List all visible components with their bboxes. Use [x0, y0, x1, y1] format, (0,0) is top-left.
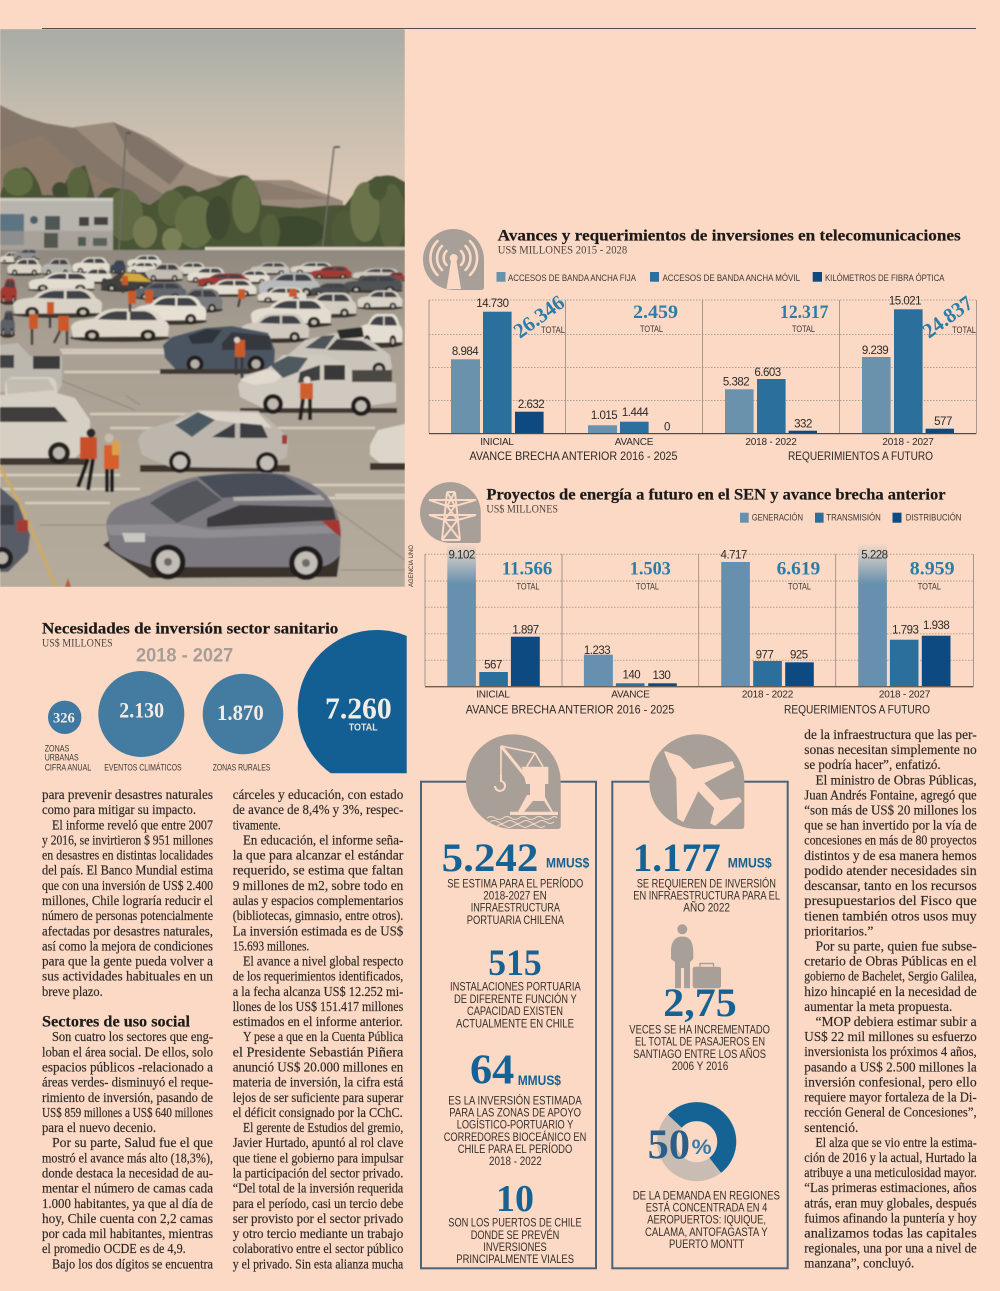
bubble labels: URBANAS	[45, 753, 79, 764]
bubble: zonas rurales: 1.870	[217, 700, 264, 725]
donut chart: 50%: %	[692, 1136, 712, 1159]
text column 2: el Presidente Sebastián Piñera	[233, 1045, 404, 1060]
stat: 64: MMUS$	[518, 1073, 561, 1088]
text column 3: El ministro de Obras Públicas,	[816, 773, 977, 788]
bar chart: energy: 8.959	[910, 558, 955, 579]
two workers	[78, 428, 120, 492]
text column 2: materia de inversión, la cifra está	[233, 1076, 404, 1091]
text column 1: US$ 859 millones a US$ 640 millones	[42, 1106, 213, 1121]
stat: 2,75: SANTIAGO ENTRE LOS AÑOS	[633, 1048, 766, 1061]
text column 1: loban el área social. De ellos, solo	[42, 1045, 213, 1060]
top rule	[42, 28, 976, 29]
text column 3: ción de 2016 y la actual, Hurtado la	[804, 1151, 977, 1166]
text column 1: como para mitigar su impacto.	[42, 803, 196, 818]
stat: 2,75: EL TOTAL DE PASAJEROS EN	[635, 1037, 765, 1049]
text column 2: para el período, casi un tercio debe	[233, 1197, 403, 1212]
text column 3: “son más de US$ 20 millones los	[804, 804, 977, 818]
text column 3: regionales, una por una a nivel de	[804, 1242, 977, 1257]
panel: telecom investments	[423, 228, 977, 463]
text column 3: se podría hacer”, enfatizó.	[804, 758, 941, 773]
bar chart: energy: 11.566	[502, 558, 552, 579]
stat: 1.177	[633, 835, 780, 915]
dark suv	[163, 326, 275, 372]
stat: 10: DONDE SE PREVÉN	[471, 1229, 559, 1242]
donut caption: PUERTO MONTT	[669, 1239, 744, 1251]
text column 3: pasando a US$ 2.500 millones la	[804, 1060, 977, 1075]
silver car top right	[288, 333, 392, 375]
text column 2: 9 millones de m2, sobre todo en	[233, 879, 403, 894]
text column 3: El alza que se vio entre la estima-	[816, 1136, 977, 1151]
donut chart: 50%: 50	[648, 1122, 690, 1168]
stat: 2,75	[629, 980, 770, 1073]
legend	[496, 272, 945, 284]
bar chart: energy: TOTAL	[918, 581, 941, 592]
bar chart: telecom: TOTAL	[952, 325, 976, 336]
text column 1: donde destaca la necesidad de au-	[42, 1166, 213, 1182]
text column 1: así como la mejora de condiciones	[42, 939, 213, 954]
text column 2: requerido, se estima que faltan	[233, 864, 403, 879]
text column 1: y 2016, se invirtieron $ 951 millones	[42, 833, 213, 848]
stat: 5.242: PORTUARIA CHILENA	[467, 915, 564, 927]
bubble labels: ZONAS	[45, 744, 69, 755]
text column 3: distintos y de esa manera hemos	[804, 849, 977, 864]
stat: 64: 2018 - 2022	[489, 1156, 542, 1168]
text column 2: Javier Hurtado, apuntó al rol clave	[233, 1136, 403, 1151]
bar chart: energy: 1.233	[584, 645, 610, 657]
text column 3: requiere mayor fortaleza de la Di-	[804, 1090, 977, 1106]
stat: 1.177: SE REQUIEREN DE INVERSIÓN	[637, 877, 776, 890]
subheading: US$ MILLONES 2015 - 2028	[498, 243, 627, 256]
text column 2: 15.693 millones.	[233, 939, 309, 954]
big grey van	[103, 540, 340, 578]
text column 3: analizamos todas las capitales	[804, 1226, 977, 1242]
heading: Avances y requerimientos de inversiones en telecomunicaciones	[498, 228, 961, 245]
workers far	[29, 276, 297, 331]
text column 1: millones, Chile lograría reducir el	[42, 894, 213, 909]
text column 3: aumentar la meta propuesta.	[804, 1000, 952, 1015]
stat: 64: 64	[470, 1047, 514, 1093]
text column 1: Son cuatro los sectores que eng-	[52, 1030, 213, 1045]
bar chart: energy: TOTAL	[788, 581, 811, 592]
text column 1: breve plazo.	[42, 985, 103, 1000]
text column 1: rimiento de inversión, pasando de	[42, 1091, 213, 1106]
text column 2: En educación, el informe seña-	[243, 833, 404, 848]
silver hatchback	[140, 465, 290, 472]
stat: 10	[448, 1178, 582, 1266]
bar chart: telecom: INICIAL	[480, 437, 514, 448]
bar chart: telecom: 12.317	[780, 302, 829, 323]
bar chart: energy: 1.503	[630, 558, 671, 579]
legend: GENERACIÓN	[752, 513, 803, 524]
stat: 2,75: 2,75	[663, 980, 737, 1025]
icon: airplane	[649, 734, 744, 829]
panel: airport infrastructure	[612, 734, 788, 1268]
text column 3: cretario de Obras Públicas en el	[804, 955, 977, 970]
panel: sanitation investment	[42, 622, 407, 774]
text column 1: el promedio OCDE es de 4,9.	[42, 1242, 186, 1257]
text column 1: para que la gente pueda volver a	[42, 954, 214, 970]
bar chart: telecom: 2018 - 2027	[882, 437, 934, 448]
stat: 64: LOGÍSTICO-PORTUARIO Y	[457, 1119, 574, 1132]
text column 3: de la infraestructura que las per-	[804, 728, 977, 743]
bubble labels: ZONAS RURALES	[213, 763, 270, 774]
bubble: eventos climaticos	[98, 671, 184, 757]
subheading: sectores: Sectores de uso social	[42, 1014, 191, 1031]
bubble labels: CIFRA ANUAL	[45, 763, 91, 774]
bar chart: telecom: 332	[794, 419, 812, 431]
bubble: zonas urbanas: 326	[53, 711, 75, 727]
text column 3: que se han invertido por la vía de	[804, 819, 977, 834]
text column 3: inversión confesional, pero ello	[804, 1075, 977, 1090]
text column 2: lejos de ser suficiente para superar	[233, 1091, 404, 1106]
bar chart: telecom: 2018 - 2022	[745, 437, 797, 448]
bar chart: telecom: AVANCE BRECHA ANTERIOR 2016 - 2025	[470, 449, 678, 463]
text column 1	[42, 788, 214, 1272]
bar chart: telecom: 1.444	[622, 407, 649, 419]
text column 3: sentenció.	[804, 1121, 858, 1136]
lamp posts	[119, 133, 334, 260]
text column 3: hizo hincapié en la necesidad de	[804, 985, 977, 1000]
donut caption: ESTÁ CONCENTRADA EN 4	[646, 1202, 768, 1214]
bar chart: telecom: 15.021	[889, 296, 921, 308]
bar chart: telecom: 5.382	[723, 377, 749, 389]
heading: Proyectos de energía a futuro en el SEN y avance brecha anterior	[486, 486, 946, 503]
legend: DISTRIBUCIÓN	[906, 513, 962, 524]
bar chart: energy: AVANCE	[611, 690, 650, 701]
text column 2: El gerente de Estudios del gremio,	[243, 1121, 403, 1136]
icon: port crane	[466, 734, 561, 829]
bar chart: energy: 6.619	[777, 558, 820, 579]
donut caption: CALAMA, ANTOFAGASTA Y	[645, 1227, 768, 1239]
bubble: total: TOTAL	[349, 723, 378, 734]
bar chart: energy: 1.938	[923, 620, 949, 632]
text column 1: en desastres en distintas localidades	[42, 849, 213, 864]
bar chart: energy: TOTAL	[636, 581, 659, 592]
text column 1: 1.000 habitantes, ya que al día de	[42, 1197, 213, 1212]
stat: 515: 515	[488, 943, 542, 984]
icon: antenna	[423, 229, 484, 290]
text column 1: para el nuevo decenio.	[42, 1121, 156, 1136]
bar chart: energy: 2018 - 2027	[879, 690, 931, 701]
text column 2: tivamente.	[233, 818, 281, 833]
right partial white car	[370, 424, 405, 464]
stat: 515: ACTUALMENTE EN CHILE	[456, 1018, 574, 1030]
text column 2: estimados en el informe anterior.	[233, 1015, 403, 1030]
stat: 5.242: INFRAESTRUCTURA	[471, 903, 560, 915]
bar chart: energy	[425, 543, 973, 716]
stat: 64: CORREDORES BIOCEÁNICO EN	[444, 1131, 586, 1144]
workers near	[235, 340, 245, 357]
bar chart: energy: 567	[484, 659, 502, 671]
stat: 10: INVERSIONES	[483, 1242, 547, 1254]
text column 1: Bajo los dos dígitos se encuentra	[52, 1257, 214, 1272]
bar chart: telecom: AVANCE	[615, 437, 654, 448]
bubble: zonas rurales	[203, 674, 283, 754]
text column 1: afectadas por desastres naturales,	[42, 924, 213, 939]
text column 1: para prevenir desastres naturales	[42, 788, 213, 803]
text column 1: El informe reveló que entre 2007	[52, 818, 213, 833]
text column 3: tienen también otros usos muy	[804, 909, 977, 924]
stat: 515: DE DIFERENTE FUNCIÓN Y	[454, 993, 577, 1006]
agency credit: AGENCIA UNO	[408, 545, 415, 587]
text column 1: que con una inversión de US$ 2.400	[42, 879, 213, 894]
stat: 64	[444, 1047, 586, 1168]
text column 2: El avance a nivel global respecto	[243, 954, 403, 970]
text column 2: cárceles y educación, con estado	[233, 788, 403, 803]
stat: 5.242: 2018-2027 EN	[483, 890, 547, 902]
text column 3: “Las primeras estimaciones, años	[804, 1181, 977, 1196]
bar chart: energy: 1.897	[512, 624, 539, 636]
stat: 2,75: 2006 Y 2016	[672, 1061, 728, 1073]
photo: vehicles at toll plaza	[0, 29, 405, 587]
bar chart: telecom: 9.239	[862, 345, 888, 357]
legend: ACCESOS DE BANDA ANCHA MÓVIL	[662, 273, 800, 284]
text column 1: espacios públicos -relacionado a	[42, 1060, 214, 1076]
white pickup	[238, 355, 396, 410]
tree line	[0, 165, 405, 255]
stat: 64: CHILE PARA EL PERÍODO	[458, 1143, 572, 1156]
text column 2: “Del total de la inversión requerida	[233, 1182, 404, 1197]
legend	[740, 513, 962, 524]
subheading: US$ MILLONES	[486, 503, 558, 516]
text column 2: la que para alcanzar el estándar	[233, 849, 404, 864]
text column 3: prioritarios.”	[804, 924, 873, 939]
icon: passenger with suitcase	[671, 924, 721, 988]
panel: port infrastructure	[421, 734, 596, 1268]
bar chart: telecom: 0	[664, 422, 670, 434]
text column 2: aulas y espacios complementarios	[233, 894, 403, 909]
text column 3: fuimos afinando la puntería y hoy	[804, 1211, 977, 1226]
text column 3: manzana”, concluyó.	[804, 1257, 914, 1272]
text column 2: de los requerimientos identificados,	[233, 970, 403, 985]
bubble labels	[45, 744, 270, 774]
bar chart: telecom: 1.015	[591, 410, 617, 422]
stat: 1.177: MMUS$	[728, 855, 772, 870]
bar chart: energy: 977	[756, 649, 773, 661]
bar chart: energy: TOTAL	[516, 581, 540, 592]
bar chart: energy: REQUERIMIENTOS A FUTURO	[784, 702, 930, 716]
stat: 10: SON LOS PUERTOS DE CHILE	[448, 1218, 582, 1230]
text column 2: que tiene el gobierno para impulsar	[233, 1151, 404, 1166]
bar chart: energy: 1.793	[892, 624, 919, 636]
bar chart: telecom: 2.459	[633, 302, 678, 323]
stat: 10: 10	[496, 1178, 534, 1220]
bar chart: telecom: 24.837	[918, 291, 977, 343]
stat: 5.242: MMUS$	[546, 855, 590, 870]
far rows of cars	[0, 252, 20, 264]
legend: TRANSMISIÓN	[826, 513, 881, 524]
bottom left dark car	[0, 487, 30, 572]
donut caption: DE LA DEMANDA EN REGIONES	[633, 1190, 780, 1202]
text column 2: la participación del sector privado.	[233, 1166, 403, 1182]
text column 2: de avance de 8,4% y 3%, respec-	[233, 803, 404, 818]
bar chart: energy: 925	[790, 649, 808, 661]
bar chart: telecom: 8.984	[452, 346, 479, 358]
bar chart: telecom: REQUERIMIENTOS A FUTURO	[788, 449, 933, 463]
bar chart: energy: INICIAL	[476, 690, 510, 701]
legend: ACCESOS DE BANDA ANCHA FIJA	[508, 273, 637, 284]
text column 3: “MOP debiera estimar subir a	[816, 1015, 977, 1030]
text column 3: podido atender necesidades sin	[804, 864, 977, 879]
bar chart: energy: AVANCE BRECHA ANTERIOR 2016 - 2025	[466, 702, 674, 716]
text column 2: llones de los US$ 151.417 millones	[233, 1000, 403, 1015]
text column 3: Por su parte, quien fue subse-	[816, 940, 977, 954]
panel: energy projects	[420, 482, 973, 716]
donut caption: AEROPUERTOS: IQUIQUE,	[647, 1215, 766, 1227]
text column 2: ser provisto por el sector privado	[233, 1212, 403, 1227]
bar chart: telecom: 26.346	[509, 290, 569, 343]
bubble: zonas urbanas	[48, 701, 81, 734]
text column 1: mostró el avance más alto (18,3%),	[42, 1151, 213, 1166]
stat: 64: PARA LAS ZONAS DE APOYO	[449, 1108, 581, 1120]
text column 2: La inversión estimada es de US$	[233, 924, 403, 939]
text column 1: mentar el número de camas cada	[42, 1182, 214, 1197]
text column 3: presupuestarios del Fisco que	[804, 894, 977, 909]
text column 2: y otro tercio mediante un trabajo	[233, 1227, 403, 1242]
stat: 1.177: AÑO 2022	[683, 902, 730, 915]
text column 1: áreas verdes- disminuyó el reque-	[42, 1076, 213, 1091]
stat: 515: CAPACIDAD EXISTEN	[467, 1006, 563, 1018]
bar chart: telecom: TOTAL	[541, 325, 565, 336]
text column 1: Por su parte, Salud fue el que	[52, 1136, 213, 1151]
bar chart: energy: 2018 - 2022	[742, 690, 794, 701]
bar chart: energy: 9.102	[448, 549, 475, 561]
donut caption	[633, 1190, 780, 1251]
text column 3	[804, 728, 977, 1272]
text column 2: a la fecha alcanza US$ 12.252 mi-	[233, 985, 404, 1000]
bubble: total	[298, 630, 407, 774]
stat: 515: INSTALACIONES PORTUARIA	[450, 982, 581, 994]
bar chart: energy: 5.228	[861, 549, 888, 561]
bar chart: energy: 140	[622, 669, 640, 681]
legend: KILÓMETROS DE FIBRA ÓPTICA	[825, 273, 945, 284]
text column 3: descansar, tanto en los recursos	[804, 879, 977, 894]
stat: 64: ES LA INVERSIÓN ESTIMADA	[448, 1094, 582, 1107]
text column 2: el déficit consignado por la CChC.	[233, 1106, 403, 1121]
text column 1: sus actividades habituales en un	[42, 970, 213, 985]
stat: 2,75: VECES SE HA INCREMENTADO	[629, 1024, 770, 1036]
bar chart: telecom: 6.603	[754, 367, 781, 379]
bar chart: energy: 130	[653, 670, 670, 682]
text column 3: rección General de Concesiones”,	[804, 1106, 977, 1121]
stat: 1.177: EN INFRAESTRUCTURA PARA EL	[633, 890, 780, 902]
stat: 10: PRINCIPALMENTE VIALES	[456, 1254, 574, 1266]
text column 2: anunció US$ 20.000 millones en	[233, 1060, 403, 1076]
near left pickup and car	[0, 343, 62, 392]
bar chart: telecom: TOTAL	[792, 324, 815, 335]
text column 1: del país. El Banco Mundial estima	[42, 864, 214, 879]
bubble labels: EVENTOS CLIMÁTICOS	[104, 763, 182, 774]
bar chart: telecom: 2.632	[518, 399, 544, 411]
subheading: US$ MILLONES	[42, 637, 113, 650]
text column 1: por cada mil habitantes, mientras	[42, 1227, 213, 1242]
text column 2: (bibliotecas, gimnasio, entre otros).	[233, 909, 403, 924]
stat: 5.242: SE ESTIMA PARA EL PERÍODO	[447, 877, 583, 890]
text column 1: número de personas potencialmente	[42, 909, 213, 924]
text column 2: y el privado. Sin esta alianza mucha	[233, 1257, 404, 1272]
period label: 2018 - 2027	[136, 646, 233, 667]
stat: 5.242: 5.242	[442, 835, 538, 880]
text column 1: hoy, Chile cuenta con 2,2 camas	[42, 1212, 213, 1227]
text column 3: atrás, eran muy globales, después	[804, 1196, 977, 1211]
stat: 515	[450, 943, 581, 1030]
donut chart: 50%	[648, 1112, 727, 1172]
bubble: total: 7.260	[325, 690, 392, 725]
road surface	[0, 250, 405, 587]
text column 3: sonas necesitan simplemente no	[804, 743, 977, 758]
text column 2	[233, 788, 404, 1272]
text column 3: Juan Andrés Fontaine, agregó que	[804, 788, 977, 803]
stat: 5.242	[442, 835, 590, 927]
text column 2: colaborativo entre el sector público	[233, 1242, 403, 1257]
text column 3: US$ 22 mil millones su esfuerzo	[804, 1030, 977, 1045]
text column 2: Y pese a que en la Cuenta Pública	[243, 1030, 404, 1045]
bar chart: telecom: 14.730	[476, 298, 509, 310]
stat: 1.177: 1.177	[633, 835, 721, 880]
bar chart: telecom: 577	[934, 416, 952, 428]
bar chart: energy: 4.717	[721, 549, 747, 561]
icon: power tower	[420, 482, 481, 543]
text column 3: inversionista los próximos 4 años,	[804, 1045, 977, 1060]
bar chart: telecom	[429, 290, 977, 463]
heading: Necesidades de inversión sector sanitario	[42, 620, 338, 637]
bubble: eventos climaticos: 2.130	[119, 698, 164, 723]
bar chart: telecom: TOTAL	[640, 324, 663, 335]
